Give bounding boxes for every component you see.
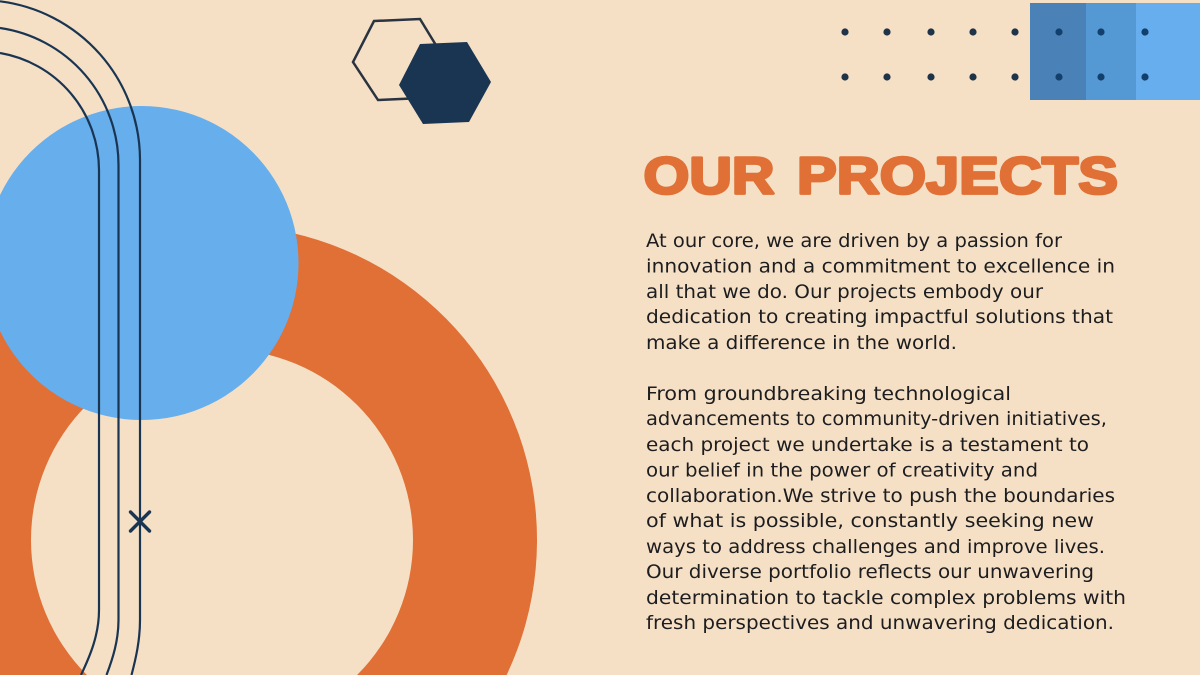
text block: first paragraph: dedication to creating impactful solutions that xyxy=(646,306,1113,328)
filled navy hexagon xyxy=(399,42,491,124)
title: PROJECTS xyxy=(797,148,1118,206)
outlined hexagon xyxy=(353,19,445,100)
blue stepped rectangle xyxy=(1030,3,1200,100)
text block: first paragraph: all that we do. Our projects embody our xyxy=(646,281,1043,303)
text block: second paragraph: Our diverse portfolio reflects our unwavering xyxy=(646,561,1094,583)
blue circle xyxy=(0,106,299,420)
text block: second paragraph: collaboration.We strive to push the boundaries xyxy=(646,485,1115,507)
text block: first paragraph xyxy=(646,230,1115,354)
text block: second paragraph xyxy=(646,383,1126,634)
text block: second paragraph: From groundbreaking technological xyxy=(646,383,1011,405)
dot grid xyxy=(841,28,1149,81)
icon: cross mark xyxy=(130,512,150,531)
text block: second paragraph: of what is possible, constantly seeking new xyxy=(646,510,1094,532)
text block: first paragraph: At our core, we are driven by a passion for xyxy=(646,230,1062,252)
title: OUR xyxy=(644,148,774,206)
text block: second paragraph: fresh perspectives and unwavering dedication. xyxy=(646,612,1114,634)
title xyxy=(644,148,1118,206)
text block: second paragraph: ways to address challenges and improve lives. xyxy=(646,536,1105,558)
curved navy lines xyxy=(0,1,140,675)
text block: first paragraph: make a difference in the world. xyxy=(646,332,957,354)
text block: second paragraph: each project we undertake is a testament to xyxy=(646,434,1089,456)
text block: second paragraph: our belief in the power of creativity and xyxy=(646,460,1038,482)
text block: second paragraph: determination to tackle complex problems with xyxy=(646,587,1126,609)
orange ring xyxy=(0,225,537,675)
text block: second paragraph: advancements to community-driven initiatives, xyxy=(646,408,1107,430)
text block: first paragraph: innovation and a commitment to excellence in xyxy=(646,256,1115,278)
